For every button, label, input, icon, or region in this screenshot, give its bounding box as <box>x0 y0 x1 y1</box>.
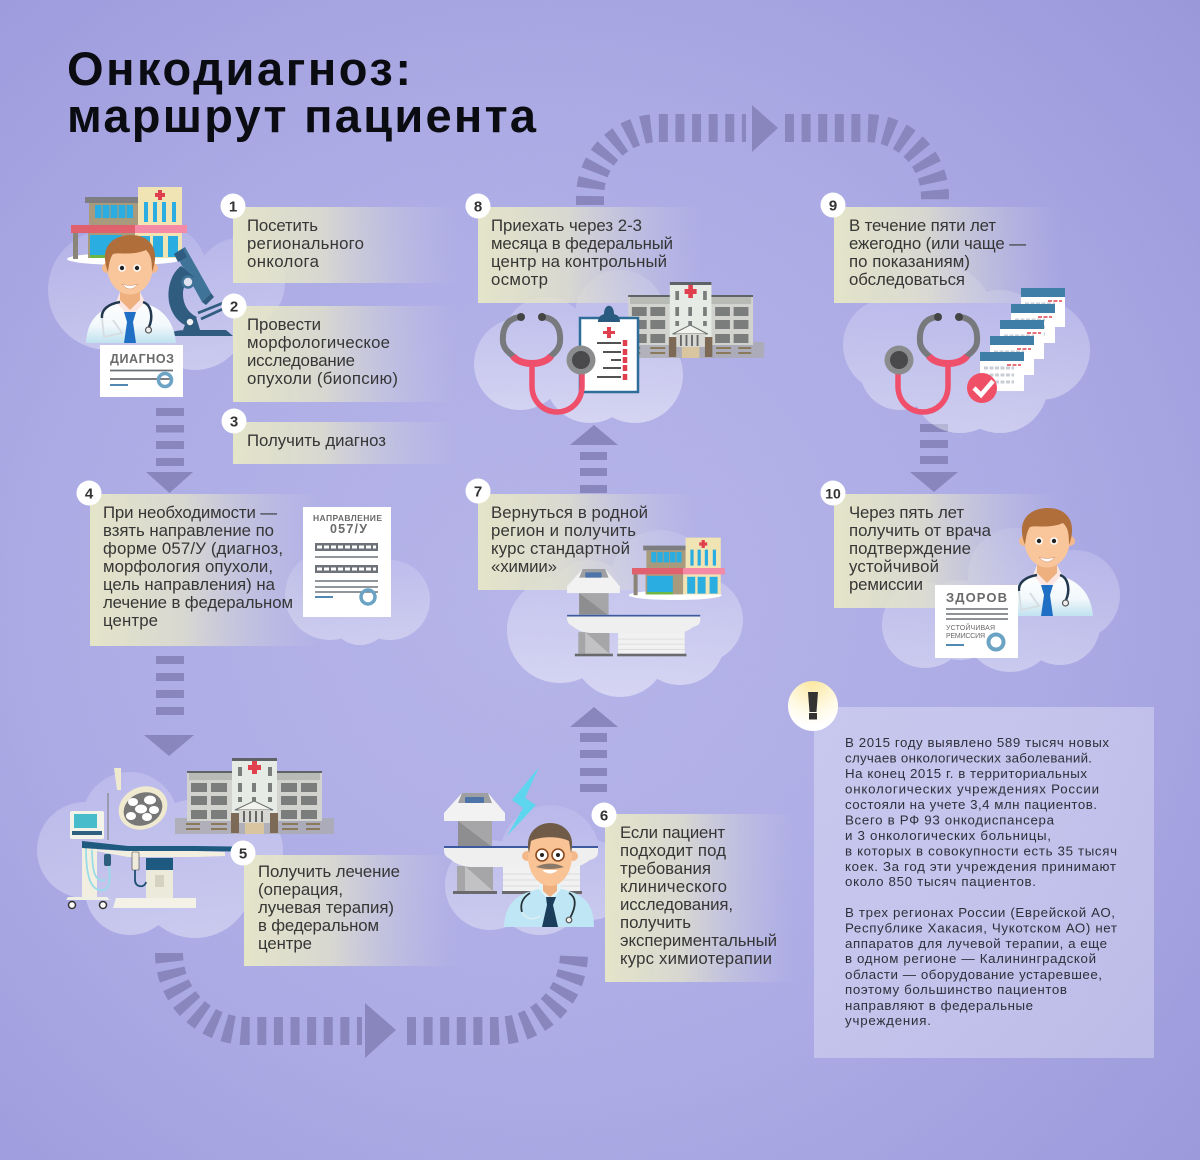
step 4 <box>76 480 325 646</box>
icon: clinic building step 1 <box>67 187 187 265</box>
step 4: форме 057/У (диагноз, <box>103 539 283 558</box>
icon: healthy certificate card: ЗДОРОВ <box>946 590 1007 605</box>
icon: doctor step 10 <box>1003 508 1093 616</box>
icon: microscope <box>168 247 233 336</box>
step 4: центре <box>103 611 158 630</box>
step 6: требования <box>620 859 711 878</box>
arrow: steps 3 to 4 <box>146 408 193 493</box>
icon: stethoscope step 9 <box>884 313 977 412</box>
step 1: 1 <box>229 198 237 216</box>
icon: stethoscope step 8 <box>503 313 596 412</box>
note panel: онкологических учреждениях России <box>845 782 1099 796</box>
step 6: подходит под <box>620 841 726 860</box>
step 9 <box>820 192 1062 303</box>
title <box>67 42 537 142</box>
step 9: обследоваться <box>849 270 965 289</box>
step 8 <box>466 194 703 303</box>
step 6: получить <box>620 913 691 932</box>
step 5 <box>230 840 459 966</box>
note panel: в которых в совокупности есть 35 тысяч <box>845 844 1117 858</box>
step 7: курс стандартной <box>491 539 630 558</box>
note panel: направляют в федеральные <box>845 998 1033 1013</box>
step 4: При необходимости — <box>103 503 277 522</box>
icon: healthy certificate card: РЕМИССИЯ <box>946 633 985 640</box>
step 10: ремиссии <box>849 575 923 594</box>
arrow: steps 4 to 5 <box>144 656 194 756</box>
step 2: Провести <box>247 315 321 334</box>
icon: diagnosis card: ДИАГНОЗ <box>110 352 174 366</box>
step 8: Приехать через 2-3 <box>491 216 642 235</box>
icon: check mark <box>967 373 997 403</box>
step 7 <box>466 478 698 590</box>
step 1: онколога <box>247 252 320 271</box>
note panel: коек. За год эти учреждения принимают <box>845 859 1116 874</box>
icon: doctor step 6 <box>504 823 594 927</box>
step 2: опухоли (биопсию) <box>247 369 398 388</box>
step 4: морфология опухоли, <box>103 557 273 576</box>
step 2: морфологическое <box>247 333 390 352</box>
icon: radiotherapy machine step 7 <box>567 569 700 656</box>
step 5: центре <box>258 934 312 953</box>
step 8: месяца в федеральный <box>491 234 673 253</box>
icon: federal hospital step 8 <box>617 282 764 358</box>
icon: exclamation mark <box>788 681 838 731</box>
icon: operating table <box>66 768 233 908</box>
icon: radiotherapy machine step 6 <box>444 793 598 894</box>
note panel: поэтому большинство пациентов <box>845 982 1067 997</box>
icon: lightning bolt <box>507 767 539 836</box>
note panel: и 3 онкологических больницы, <box>845 828 1051 843</box>
step 9: 9 <box>829 198 837 214</box>
step 6: клинического <box>620 877 727 896</box>
note panel: аппаратов для лучевой терапии, а еще <box>845 936 1107 951</box>
step 10: устойчивой <box>849 557 939 576</box>
step 6: исследования, <box>620 895 733 914</box>
note panel: учреждения. <box>845 1013 931 1028</box>
step 2: исследование <box>247 351 355 370</box>
step 5: лучевая терапия) <box>258 898 394 917</box>
note panel: около 850 тысяч пациентов. <box>845 874 1036 889</box>
step 7: регион и получить <box>491 521 636 540</box>
cloud: step 1 <box>48 222 285 370</box>
step 10: Через пять лет <box>849 503 964 522</box>
note panel <box>814 707 1154 1058</box>
note panel: В 2015 году выявлено 589 тысяч новых <box>845 735 1109 750</box>
step 2 <box>222 294 458 402</box>
note panel: На конец 2015 г. в территориальных <box>845 766 1087 781</box>
cloud: step 10 <box>882 528 1120 672</box>
step 6 <box>592 802 795 982</box>
icon: referral form 057/U: 057/У <box>330 522 367 536</box>
cloud: step 6 <box>445 805 630 935</box>
arrow: steps 5 to 6 (curved) <box>169 953 574 1058</box>
step 6: экспериментальный <box>620 931 777 950</box>
arrow: steps 8 to 9 (curved) <box>590 105 935 205</box>
step 5: в федеральном <box>258 916 379 935</box>
step 6: курс химиотерапии <box>620 949 772 968</box>
arrow: steps 9 to 10 <box>910 424 958 492</box>
step 1: Посетить <box>247 216 318 235</box>
note panel: Республике Хакасия, Чукотском АО) нет <box>845 920 1117 936</box>
step 8: центр на контрольный <box>491 252 667 271</box>
step 4: 4 <box>85 486 94 502</box>
cloud: step 4 <box>285 543 430 645</box>
step 9: по показаниям) <box>849 252 970 271</box>
icon: calendars <box>980 288 1065 391</box>
step 9: ежегодно (или чаще — <box>849 234 1026 253</box>
step 5: Получить лечение <box>258 862 400 881</box>
arrow: steps 6 to 7 <box>570 707 618 792</box>
step 10 <box>820 480 1059 608</box>
step 10: подтверждение <box>849 539 971 558</box>
step 3: Получить диагноз <box>247 431 386 450</box>
icon: healthy certificate card <box>935 585 1018 658</box>
step 2: 2 <box>230 298 238 316</box>
cloud: step 7 <box>507 530 743 697</box>
step 1 <box>220 194 458 283</box>
icon: clinic building step 7 <box>629 538 725 600</box>
step 1: регионального <box>247 234 364 253</box>
title: маршрут пациента <box>67 89 537 142</box>
step 4: взять направление по <box>103 521 274 540</box>
note panel: В трех регионах России (Еврейской АО, <box>845 905 1115 920</box>
step 4: цель направления) на <box>103 575 276 594</box>
cloud: step 8 <box>474 270 683 423</box>
icon: diagnosis card <box>100 345 183 397</box>
icon: federal hospital step 5 <box>175 758 334 834</box>
step 5: 5 <box>239 846 247 862</box>
icon: healthy certificate card: УСТОЙЧИВАЯ <box>946 623 995 632</box>
note panel: случаев онкологических заболеваний. <box>845 750 1092 766</box>
step 4: лечение в федеральном <box>103 593 293 612</box>
step 9: В течение пяти лет <box>849 216 996 235</box>
step 6: 6 <box>600 808 608 824</box>
icon: clipboard <box>580 306 638 392</box>
step 10: получить от врача <box>849 521 992 540</box>
step 10: 10 <box>825 486 841 502</box>
cloud: step 9 <box>843 263 1090 433</box>
icon: referral form 057/U <box>303 507 391 617</box>
step 5: (операция, <box>258 880 343 899</box>
cloud: step 5 <box>37 772 283 938</box>
note panel: Всего в РФ 93 онкодиспансера <box>845 812 1055 828</box>
icon: referral form 057/U: НАПРАВЛЕНИЕ <box>313 513 382 523</box>
step 6: Если пациент <box>620 823 725 842</box>
title: Онкодиагноз: <box>67 42 411 95</box>
step 7: 7 <box>474 484 482 500</box>
step 8: осмотр <box>491 270 548 289</box>
step 3 <box>222 408 458 464</box>
arrow: steps 7 to 8 <box>570 425 618 493</box>
step 8: 8 <box>474 198 482 216</box>
note panel: в одном регионе — Калининградской <box>845 951 1096 966</box>
note panel: состояли на учете 3,4 млн пациентов. <box>845 797 1097 812</box>
note panel: области — оборудование устаревшее, <box>845 967 1102 982</box>
icon: doctor step 1 <box>86 235 176 343</box>
step 7: Вернуться в родной <box>491 503 648 522</box>
step 3: 3 <box>230 414 238 430</box>
step 7: «химии» <box>491 557 557 576</box>
